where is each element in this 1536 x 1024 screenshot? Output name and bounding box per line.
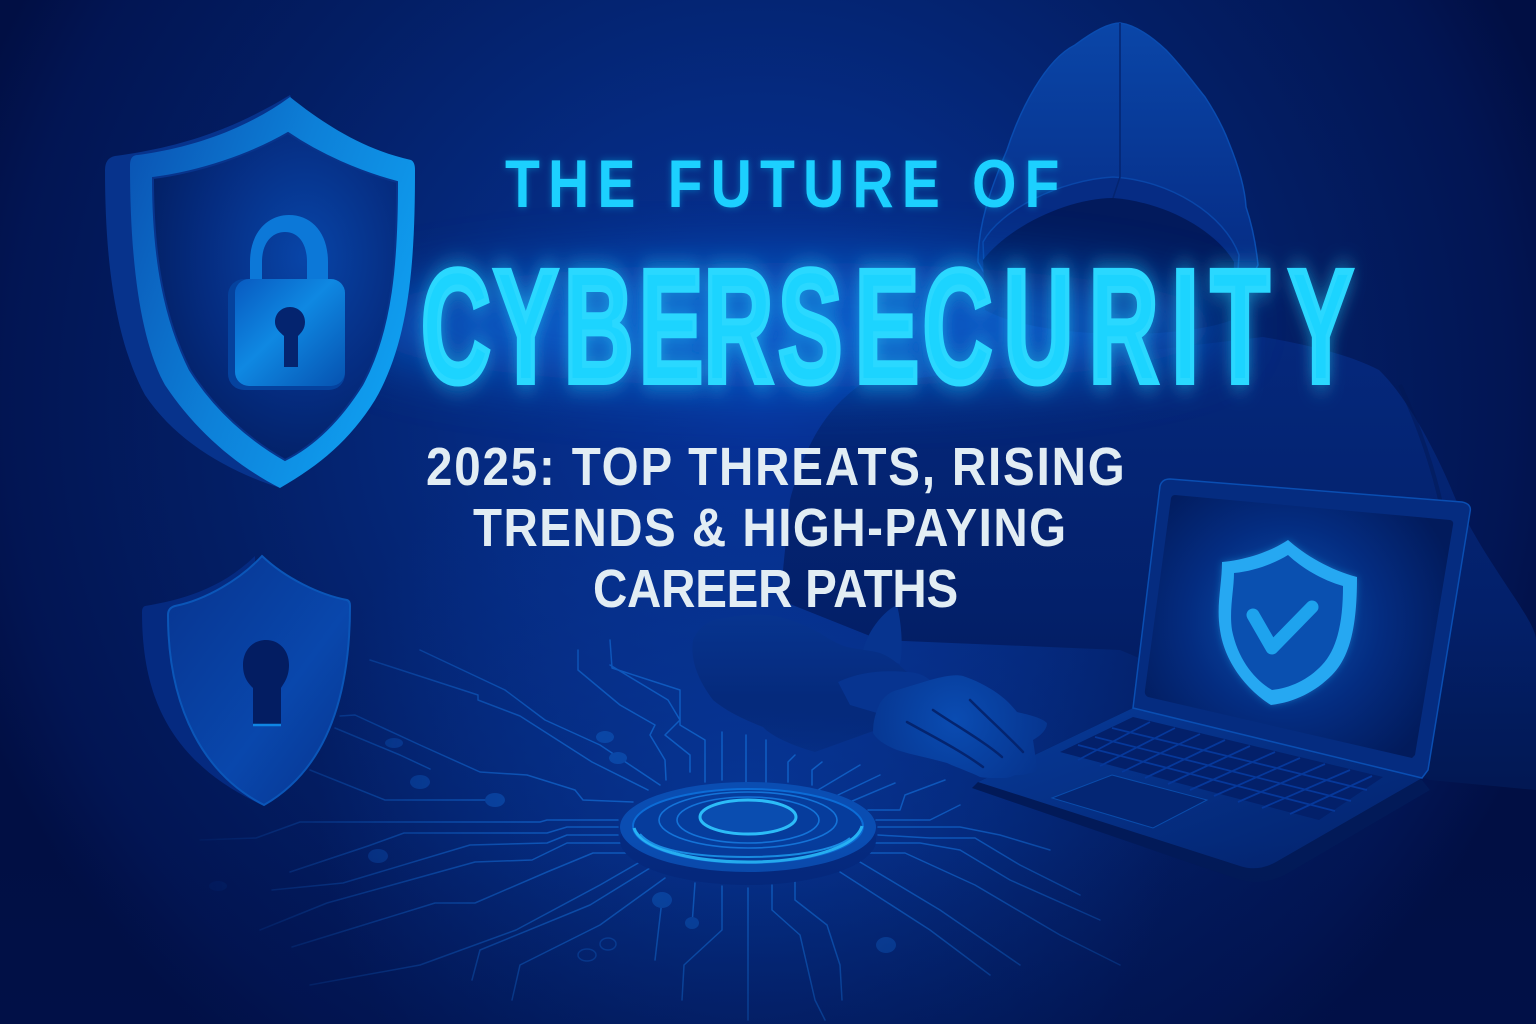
laptop keyboard: [1060, 717, 1383, 820]
finger lines: [907, 700, 1023, 767]
padlock: [228, 215, 345, 390]
bottom vignette: [0, 840, 1536, 1024]
laptop lid: [1133, 479, 1470, 778]
shield inner panel: [153, 133, 397, 460]
far arm shadow: [863, 605, 902, 664]
subtitle line 2: TRENDS & HIGH-PAYING: [473, 497, 1066, 558]
shield side extrusion: [105, 95, 320, 488]
shadowed face: [983, 198, 1234, 334]
heading: the future of: THE FUTURE OF: [505, 146, 1059, 222]
subtitle line 3: CAREER PATHS: [593, 558, 958, 619]
laptop screen: [1145, 495, 1453, 758]
arm and hand on keyboard: [692, 605, 1047, 778]
cuff: [838, 671, 930, 713]
hood: [978, 23, 1258, 300]
shield front rim: [130, 97, 415, 488]
large shield with padlock: [105, 95, 415, 488]
subtitle: [426, 436, 1125, 619]
hand: [873, 675, 1047, 778]
heading: cybersecurity: CYBERSECURITY: [421, 237, 1353, 415]
subtitle line 1: 2025: TOP THREATS, RISING: [426, 436, 1125, 497]
laptop base: [972, 708, 1430, 882]
laptop: [972, 479, 1470, 882]
laptop trackpad: [1052, 775, 1207, 828]
circuit traces: [200, 640, 1120, 1020]
hood brim: [983, 177, 1239, 300]
hacker figure: [780, 23, 1536, 790]
small shield with keyhole: [142, 556, 350, 805]
title glow: [350, 263, 1230, 387]
glowing centre disc: [620, 782, 876, 885]
sleeve: [692, 614, 907, 752]
screen shield icon with check mark: [1219, 540, 1357, 705]
